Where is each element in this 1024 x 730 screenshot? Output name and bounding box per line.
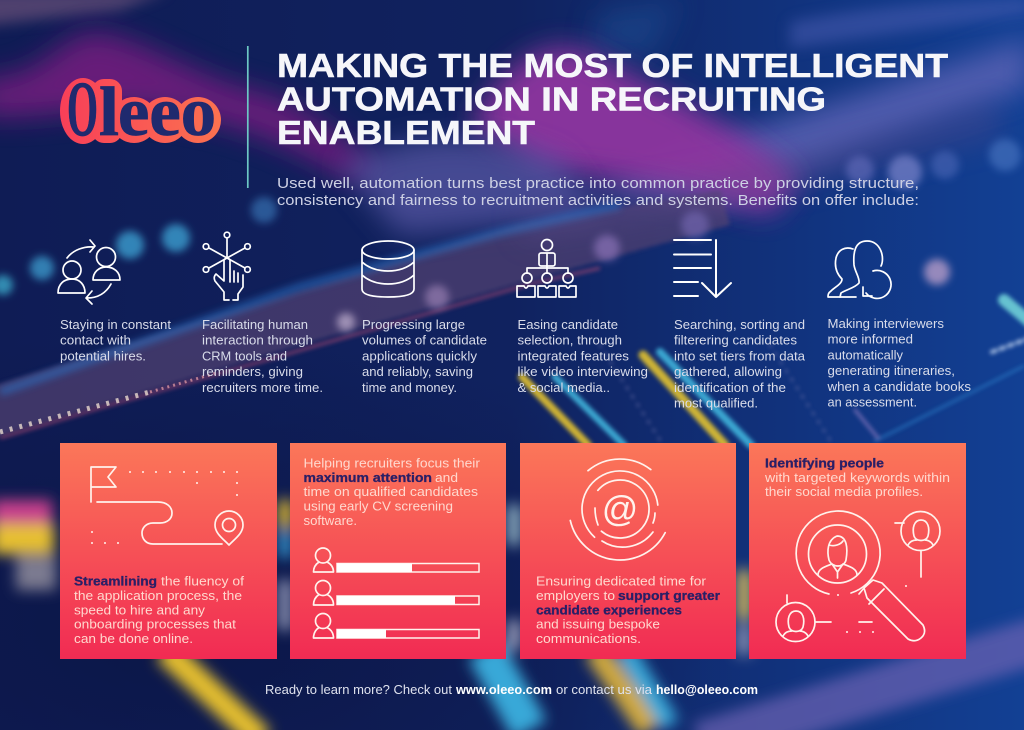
text: ensuring dedicated time: employers to	[536, 589, 615, 603]
text: streamlining: Streamlining	[74, 574, 157, 588]
text: informed interviewers: automatically	[828, 348, 904, 362]
text: informed interviewers: an assessment.	[828, 396, 917, 410]
text: ensuring dedicated time: and issuing bespoke	[536, 618, 660, 632]
footer call to action: Ready to learn more? Check out	[265, 683, 453, 697]
footer call to action	[265, 683, 758, 697]
text: searching and sorting: identification of the	[674, 381, 786, 395]
text: easing selection: Easing candidate	[518, 318, 618, 332]
title: MAKING THE MOST OF INTELLIGENT	[277, 47, 948, 84]
text: progressing volumes: applications quickly	[362, 349, 478, 363]
text: staying in contact: contact with	[60, 334, 131, 348]
text: easing selection: selection, through	[518, 334, 622, 348]
intro text: consistency and fairness to recruitment activities and systems. Benefits on offer include:	[277, 192, 919, 209]
text: ensuring dedicated time: support greater	[618, 589, 720, 603]
header divider	[247, 46, 249, 188]
title: AUTOMATION IN RECRUITING	[277, 80, 826, 118]
benefit 4: candidate selection	[517, 240, 648, 395]
text: identifying people	[764, 456, 950, 499]
text: searching and sorting: gathered, allowing	[674, 365, 782, 379]
panel: streamlining	[60, 443, 277, 659]
text: helping recruiters: software.	[304, 514, 357, 528]
text: staying in contact: Staying in constant	[60, 318, 172, 332]
text: streamlining: the fluency of	[161, 574, 245, 588]
icon: touch network	[203, 232, 250, 300]
text: streamlining: can be done online.	[74, 632, 193, 646]
text: streamlining	[74, 574, 245, 646]
intro text	[277, 175, 919, 209]
text: searching and sorting: Searching, sorting and	[674, 318, 805, 332]
title: ENABLEMENT	[277, 114, 535, 151]
text: easing selection: & social media..	[518, 381, 610, 395]
text: progressing volumes: volumes of candidate	[362, 334, 487, 348]
text: ensuring dedicated time: communications.	[536, 632, 641, 646]
icon: people with exchange arrows	[58, 240, 120, 304]
text: streamlining: onboarding processes that	[74, 618, 237, 632]
text: facilitating interaction: Facilitating human	[202, 318, 308, 332]
icon: at sign with concentric rings	[570, 459, 665, 560]
text: informed interviewers: generating itineraries,	[828, 364, 955, 378]
text: progressing volumes: Progressing large	[362, 318, 465, 332]
text: ensuring dedicated time	[536, 574, 720, 646]
text: searching and sorting: into set tiers from data	[674, 349, 805, 363]
text: helping recruiters: time on qualified candidates	[304, 485, 478, 499]
text: streamlining: speed to hire and any	[74, 603, 206, 617]
text: identifying people: with targeted keywords within	[764, 471, 950, 485]
panel: candidate experience	[520, 443, 736, 659]
logo: Oleeo: l	[99, 74, 119, 151]
icon: people with refresh arrow	[828, 241, 891, 298]
text: progressing volumes: and reliably, saving	[362, 365, 473, 379]
text: searching and sorting: most qualified.	[674, 396, 758, 410]
logo: Oleeo: O	[67, 65, 98, 152]
benefit 6: informed interviewers	[826, 241, 971, 410]
footer call to action: hello@oleeo.com	[656, 683, 758, 697]
text: ensuring dedicated time: candidate experiences	[536, 603, 682, 617]
text: staying in contact: potential hires.	[60, 349, 146, 363]
text: identifying people: Identifying people	[765, 456, 884, 470]
icon: route from flag to pin	[91, 467, 243, 545]
text: facilitating interaction: CRM tools and	[202, 349, 287, 363]
text: helping recruiters: and	[435, 471, 458, 485]
logo: Oleeo: eeo	[118, 74, 216, 151]
footer call to action: www.oleeo.com	[455, 683, 552, 697]
text: facilitating interaction: recruiters more time.	[202, 381, 323, 395]
text: staying in contact	[60, 318, 172, 363]
panel: identifying people	[749, 443, 966, 659]
text: facilitating interaction: reminders, giving	[202, 365, 303, 379]
text: informed interviewers: more informed	[828, 333, 913, 347]
text: informed interviewers	[826, 317, 971, 410]
text: helping recruiters	[304, 456, 480, 528]
icon: database	[362, 241, 414, 297]
panel: screening	[290, 443, 506, 659]
title	[277, 47, 948, 151]
text: searching and sorting: filterering candidates	[674, 334, 797, 348]
text: ensuring dedicated time: Ensuring dedicated time for	[536, 574, 706, 588]
text: helping recruiters: Helping recruiters focus their	[304, 456, 480, 470]
text: informed interviewers: when a candidate books	[826, 380, 971, 394]
text: easing selection	[518, 318, 648, 395]
text: easing selection: integrated features	[518, 349, 629, 363]
text: informed interviewers: Making interviewers	[828, 317, 944, 331]
text: identifying people: their social media profiles.	[765, 485, 923, 499]
text: facilitating interaction	[202, 318, 323, 395]
benefit 2: human interaction	[202, 232, 323, 395]
text: facilitating interaction: interaction through	[202, 334, 313, 348]
chart: candidate score bars	[314, 548, 479, 638]
footer call to action: or contact us via	[556, 683, 652, 697]
icon: hierarchy	[517, 240, 576, 297]
text: helping recruiters: maximum attention	[304, 471, 432, 485]
text: progressing volumes: time and money.	[362, 381, 457, 395]
text: streamlining: the application process, the	[74, 589, 242, 603]
icon: magnifier over candidate profiles	[776, 511, 940, 642]
text: helping recruiters: using early CV screening	[304, 500, 453, 514]
intro text: Used well, automation turns best practice into common practice by providing structure,	[277, 175, 919, 192]
icon: at sign with concentric rings: @	[602, 488, 638, 529]
icon: sorted list with down arrow	[674, 240, 731, 297]
benefit 5: searching and sorting	[674, 240, 805, 410]
logo: Oleeo	[60, 65, 221, 152]
benefit 3: large volumes	[362, 241, 487, 395]
benefit 1: constant contact	[58, 240, 172, 363]
text: progressing volumes	[362, 318, 487, 395]
text: easing selection: like video interviewing	[518, 365, 648, 379]
text: searching and sorting	[674, 318, 805, 410]
